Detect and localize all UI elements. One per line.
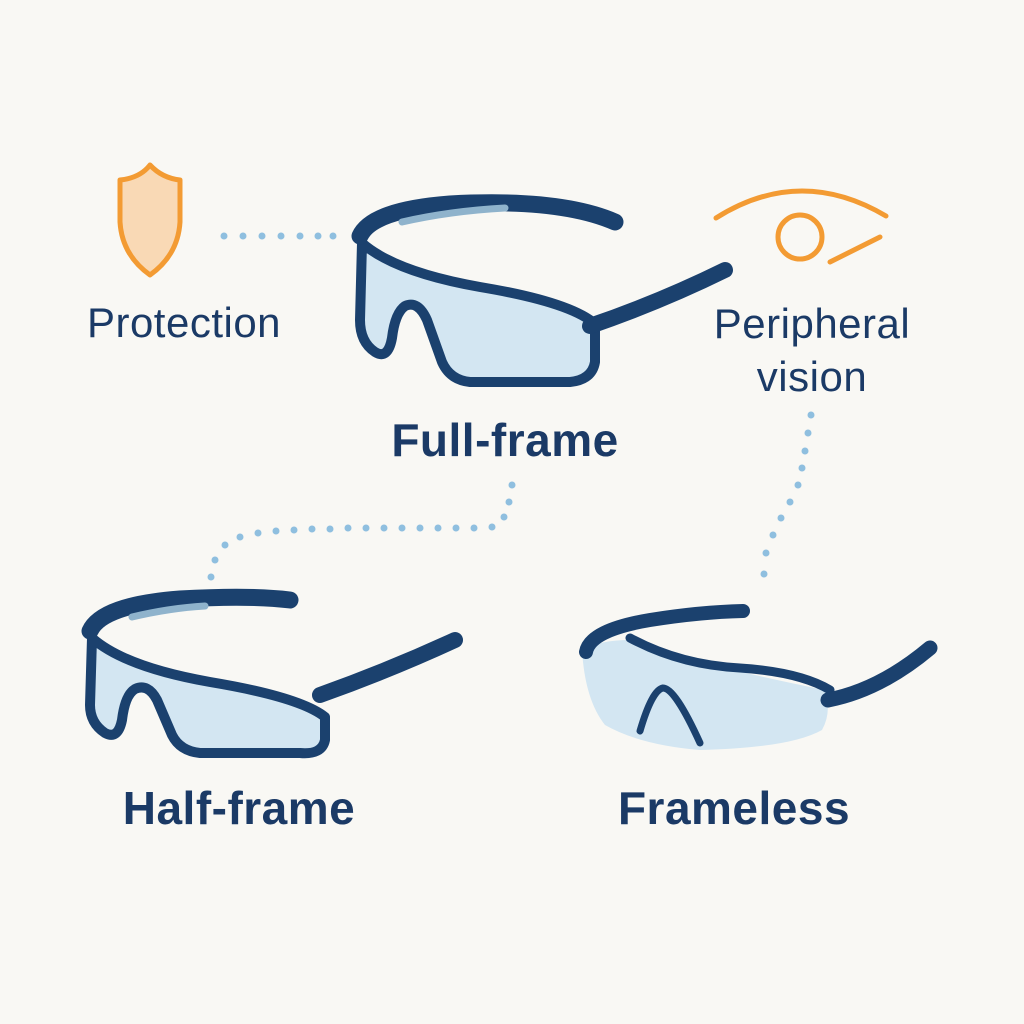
text: frameless: Frameless xyxy=(618,782,850,834)
text: peripheral vision: vision xyxy=(757,353,867,400)
glasses: frameless xyxy=(582,611,930,750)
text: half-frame: Half-frame xyxy=(123,782,355,834)
glasses: full-frame xyxy=(360,203,725,382)
text: protection: Protection xyxy=(87,299,281,346)
glasses: half-frame xyxy=(90,597,455,753)
text: peripheral vision: Peripheral xyxy=(714,300,910,347)
dotted connector: peripheral vision to frameless xyxy=(760,412,814,578)
dotted connector: full-frame to half-frame xyxy=(208,482,516,580)
icon: peripheral vision eye xyxy=(716,191,886,262)
text: peripheral vision xyxy=(714,300,910,400)
text: full-frame: Full-frame xyxy=(391,414,619,466)
icon: protection shield xyxy=(120,165,180,275)
dotted connector: protection to full-frame xyxy=(220,232,336,240)
